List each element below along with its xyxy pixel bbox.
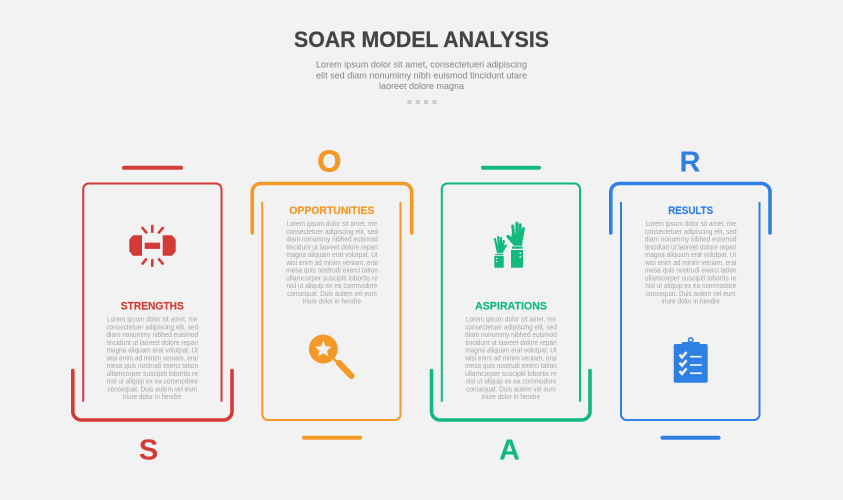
body text: nisl ut aliquip ex ea commodore	[107, 378, 198, 386]
top bracket	[252, 184, 412, 233]
body text	[285, 220, 378, 306]
body text	[464, 316, 557, 401]
body text: Lorem ipsum dolor sit amet, me	[466, 316, 556, 324]
card outline	[83, 184, 222, 402]
body text: magna aliquam erat volutpat. Ut	[107, 346, 198, 354]
body text: ullamcorper suscipiti lobortis re	[286, 274, 378, 282]
heading: OPPORTUNITIES	[289, 205, 375, 217]
body text: diam nonummy nibhed euismod	[465, 331, 557, 339]
body text: nisl ut aliquip ex ea commodore	[466, 378, 557, 386]
bottom accent bar	[304, 436, 360, 440]
bottom bracket	[73, 370, 232, 420]
body text: wisi enim ad minim veniam, erai	[644, 259, 737, 267]
bottom accent bar	[662, 436, 718, 440]
body text: tincidunt ut laoreet dolore repari	[286, 243, 378, 251]
body text: Lorem ipsum dolor sit amet, me	[287, 220, 377, 228]
heading: RESULTS	[668, 205, 714, 217]
panel: aspirations	[432, 168, 590, 466]
body text: consequat. Duis autem vel eum	[287, 290, 377, 298]
body text: mesa quis nostrudi exerci tation	[645, 266, 737, 274]
body text: mesa quis nostrudi exerci tation	[106, 362, 198, 370]
heading: ASPIRATIONS	[475, 300, 547, 312]
top accent bar	[483, 166, 539, 170]
body text: magna aliquam erat volutpat. Ut	[645, 251, 736, 259]
body text: ullamcorper suscipiti lobortis re	[106, 370, 198, 378]
body text: wisi enim ad minim veniam, erai	[285, 259, 378, 267]
body text: diam nonummy nibhed euismod	[645, 236, 737, 244]
body text: ullamcorper suscipiti lobortis re	[465, 370, 557, 378]
icon: dumbbell with rays	[129, 226, 176, 266]
body text: iriure dolor in hendre	[123, 393, 181, 401]
heading: STRENGTHS	[121, 300, 184, 312]
body text	[106, 316, 198, 401]
body text: iriure dolor in hendre	[662, 298, 720, 306]
body text: consectetuer adipiscing elit, sed	[286, 228, 378, 236]
body text: mesa quis nostrudi exerci tation	[465, 362, 557, 370]
card outline	[621, 202, 760, 420]
body text: tincidunt ut laoreet dolore repari	[107, 339, 198, 347]
top bracket	[611, 184, 770, 233]
body text: Lorem ipsum dolor sit amet, me	[107, 316, 197, 324]
body text: wisi enim ad minim veniam, erai	[464, 354, 557, 362]
body text: tincidunt ut laoreet dolore repari	[645, 243, 737, 251]
body text: diam nonummy nibhed euismod	[106, 331, 198, 339]
letter A: A	[499, 434, 520, 466]
body text: consectetuer adipiscing elit, sed	[465, 323, 557, 331]
letter O: O	[317, 143, 341, 178]
body text: iriure dolor in hendre	[303, 298, 361, 306]
body text: consequat. Duis autem vel eum	[646, 290, 736, 298]
body text: consequat. Duis autem vel eum	[466, 385, 556, 393]
top accent bar	[124, 166, 181, 170]
body text: diam nonummy nibhed euismod	[286, 236, 378, 244]
body text: wisi enim ad minim veniam, erai	[106, 354, 198, 362]
pagination dots	[408, 100, 436, 104]
subtitle text: laoreet dolore magna	[379, 81, 465, 91]
body text: magna aliquam erat volutpat. Ut	[286, 251, 378, 259]
panel: strengths	[73, 168, 232, 466]
panel: results	[611, 147, 770, 438]
title: SOAR MODEL ANALYSIS	[294, 27, 549, 52]
card outline	[442, 184, 580, 402]
body text: tincidunt ut laoreet dolore repari	[465, 339, 557, 347]
icon: raised hands	[494, 223, 524, 268]
body text: iriure dolor in hendre	[482, 393, 540, 401]
subtitle text	[316, 60, 527, 91]
subtitle text: Lorem ipsum dolor sit amet, consectetueri adipiscing	[316, 60, 527, 70]
body text: nisl ut aliquip ex ea commodore	[645, 282, 736, 290]
subtitle text: elit sed diam nonumimy nibh euismod tincidunt utare	[316, 70, 527, 80]
icon: magnifier with star	[309, 334, 352, 376]
body text: ullamcorper suscipiti lobortis re	[645, 274, 737, 282]
letter R: R	[680, 147, 701, 179]
body text: mesa quis nostrudi exerci tation	[286, 266, 378, 274]
body text: consequat. Duis autem vel eum	[107, 385, 197, 393]
body text	[644, 220, 737, 306]
body text: magna aliquam erat volutpat. Ut	[465, 346, 557, 354]
icon: clipboard checklist	[674, 337, 708, 383]
panel: opportunities	[252, 143, 412, 438]
header	[294, 27, 549, 104]
body text: consectetuer adipiscing elit, sed	[106, 323, 198, 331]
body text: Lorem ipsum dolor sit amet, me	[646, 220, 736, 228]
card outline	[262, 202, 400, 420]
body text: nisl ut aliquip ex ea commodore	[286, 282, 378, 290]
bottom bracket	[432, 370, 590, 420]
letter S: S	[139, 434, 158, 466]
body text: consectetuer adipiscing elit, sed	[645, 228, 737, 236]
